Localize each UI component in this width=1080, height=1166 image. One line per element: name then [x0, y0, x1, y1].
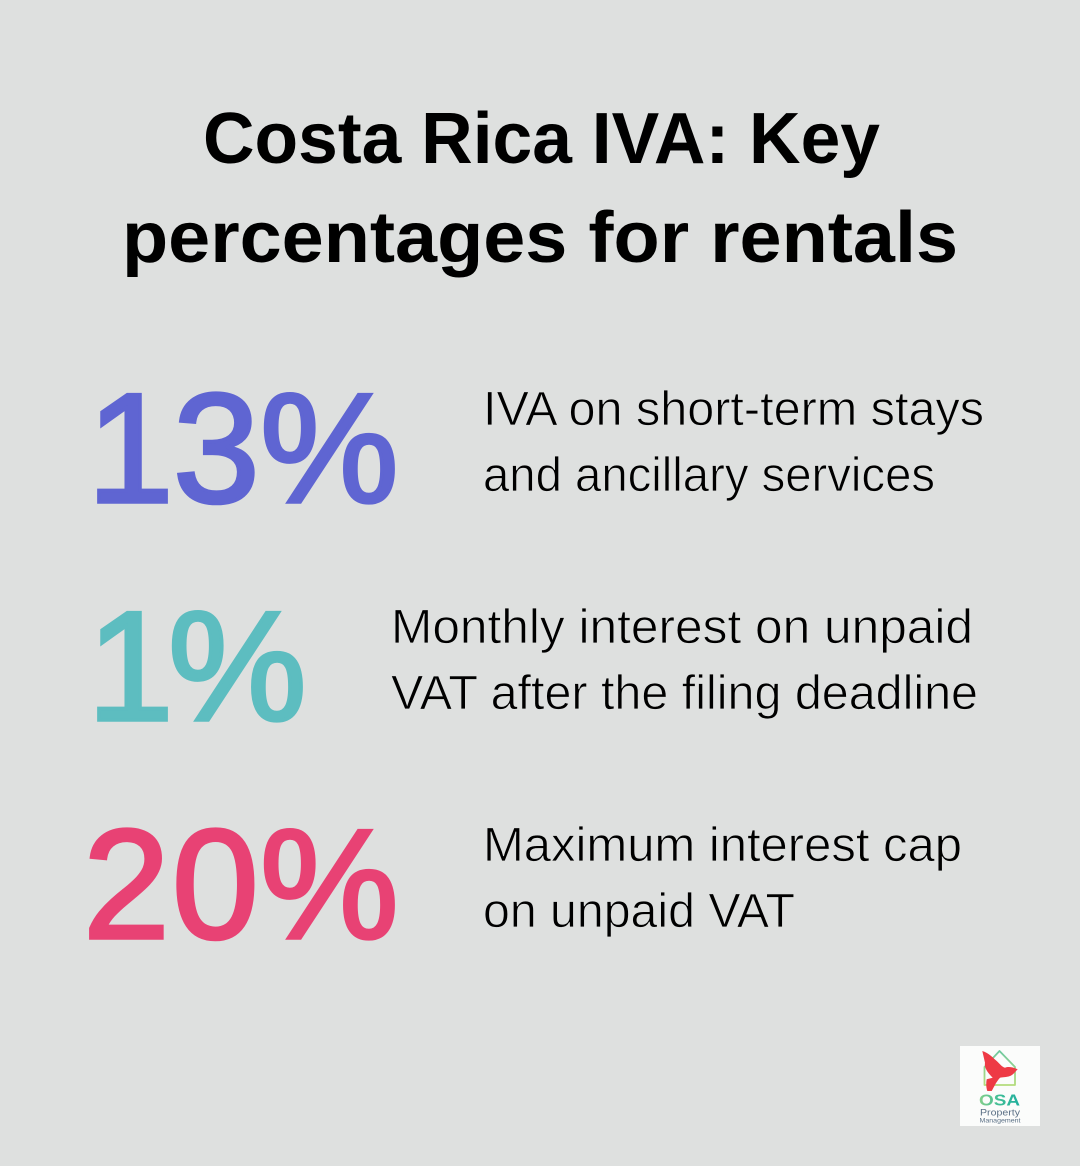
stat: 13%	[87, 362, 984, 536]
logo: OSA Property Management	[960, 1046, 1040, 1126]
icon: house outline	[984, 1051, 1015, 1085]
logo text: OSA	[979, 1092, 1020, 1110]
description: 20%: Maximum interest cap	[483, 819, 962, 872]
icon: red bird	[982, 1051, 1018, 1091]
description: 20%	[483, 819, 962, 938]
description: 13%: and ancillary services	[483, 449, 935, 502]
description: 1%	[391, 601, 978, 720]
title	[122, 99, 958, 278]
description: 20%: on unpaid VAT	[483, 885, 795, 938]
number: 13%: 13%	[87, 362, 399, 536]
logo text	[979, 1092, 1021, 1124]
logo text: Management	[980, 1118, 1021, 1124]
description: 1%: Monthly interest on unpaid	[391, 601, 973, 654]
title: percentages for rentals	[122, 198, 958, 278]
title: Costa Rica IVA: Key	[203, 99, 880, 179]
number: 1%: 1%	[87, 580, 307, 754]
number: 20%: 20%	[83, 798, 399, 972]
description: 13%	[483, 383, 984, 502]
description: 13%: IVA on short-term stays	[483, 383, 984, 436]
logo text: Property	[980, 1108, 1020, 1118]
stat: 20%	[83, 798, 962, 972]
description: 1%: VAT after the filing deadline	[391, 667, 978, 720]
stat: 1%	[87, 580, 978, 754]
